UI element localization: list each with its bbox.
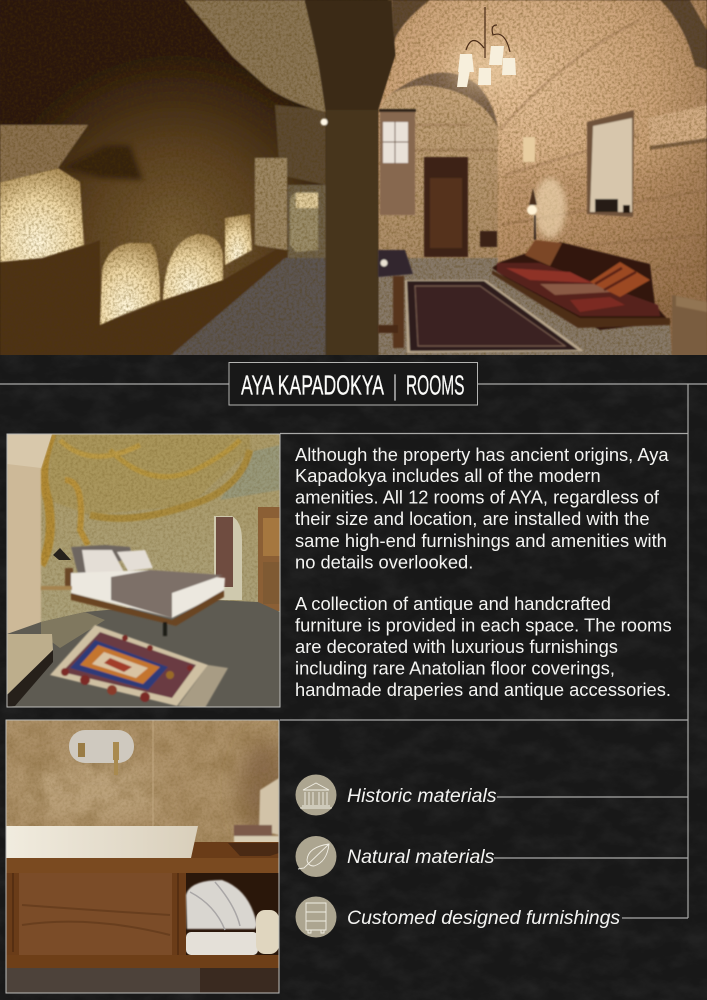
icon: leaf <box>296 836 336 877</box>
lit niches <box>0 168 252 325</box>
feature row: natural materials <box>296 836 688 877</box>
label: Customed designed furnishings <box>347 907 620 929</box>
small lit recess <box>523 137 535 162</box>
faucet plate <box>69 730 134 775</box>
wooden door <box>424 157 468 257</box>
paragraph two: including rare Anatolian floor coverings, <box>295 658 615 678</box>
side table <box>378 250 413 348</box>
window and curtain <box>380 112 415 215</box>
hero photo: cave corridor and vaulted room <box>0 0 707 356</box>
connector <box>494 857 688 859</box>
stone pillar <box>305 0 395 356</box>
feature row: customed designed furnishings <box>296 896 688 938</box>
photo: cave bedroom <box>7 434 280 708</box>
ochre ceiling veins <box>41 434 280 565</box>
paragraph one: Although the property has ancient origins, Aya <box>295 444 669 465</box>
title box <box>229 362 478 405</box>
paragraph two <box>295 593 672 700</box>
title text: AYA KAPADOKYA <box>241 369 384 400</box>
wall lamp <box>534 178 566 238</box>
paragraph two: are decorated with luxurious furnishings <box>295 636 618 657</box>
open shelf with towels <box>186 873 279 955</box>
carpet <box>405 280 584 353</box>
hero stone texture <box>0 0 707 356</box>
feature row: historic materials <box>296 774 688 816</box>
paragraph one: no details overlooked. <box>295 552 473 572</box>
wall niche <box>587 110 634 217</box>
floor <box>6 968 200 992</box>
photo: bathroom vanity <box>6 720 290 993</box>
paragraph two: handmade draperies and antique accessories. <box>295 679 671 700</box>
icon: chest of drawers <box>296 896 336 938</box>
paragraph one: same high-end furnishings and amenities with <box>295 530 667 551</box>
paragraph one: amenities. All 12 rooms of AYA, regardless of <box>295 486 660 508</box>
sofa <box>492 240 670 330</box>
wood chest <box>672 295 707 356</box>
title text: ROOMS <box>406 369 464 400</box>
countertop items <box>234 778 279 844</box>
wardrobe <box>258 507 280 611</box>
icon: temple <box>296 774 336 816</box>
sink basin <box>6 826 198 858</box>
chandelier <box>449 7 521 92</box>
wooden drawer <box>13 873 178 955</box>
doorway <box>214 516 242 600</box>
label: Natural materials <box>347 846 495 868</box>
bed <box>41 545 225 636</box>
cave wall <box>0 0 330 356</box>
paragraph one: their size and location, are installed with the <box>295 508 650 529</box>
title text: | <box>394 369 396 400</box>
wall vent <box>480 231 497 247</box>
connector <box>497 796 688 798</box>
counter edge <box>6 858 279 873</box>
left pillar <box>7 434 52 634</box>
paragraph one <box>295 444 669 572</box>
connector <box>622 917 688 919</box>
bedside lamp <box>53 548 71 560</box>
paragraph two: furniture is provided in each space. The rooms <box>295 614 672 636</box>
paragraph one: Kapadokya includes all of the modern <box>295 465 601 486</box>
vaulted room stone <box>378 0 707 356</box>
bathroom photo frame <box>6 720 279 993</box>
label: Historic materials <box>347 785 497 807</box>
paragraph two: A collection of antique and handcrafted <box>295 593 611 614</box>
photo frame <box>7 434 280 707</box>
bench <box>7 634 53 695</box>
kilim rug <box>50 625 228 708</box>
title connector lines <box>0 384 707 918</box>
stone floor <box>7 600 280 707</box>
